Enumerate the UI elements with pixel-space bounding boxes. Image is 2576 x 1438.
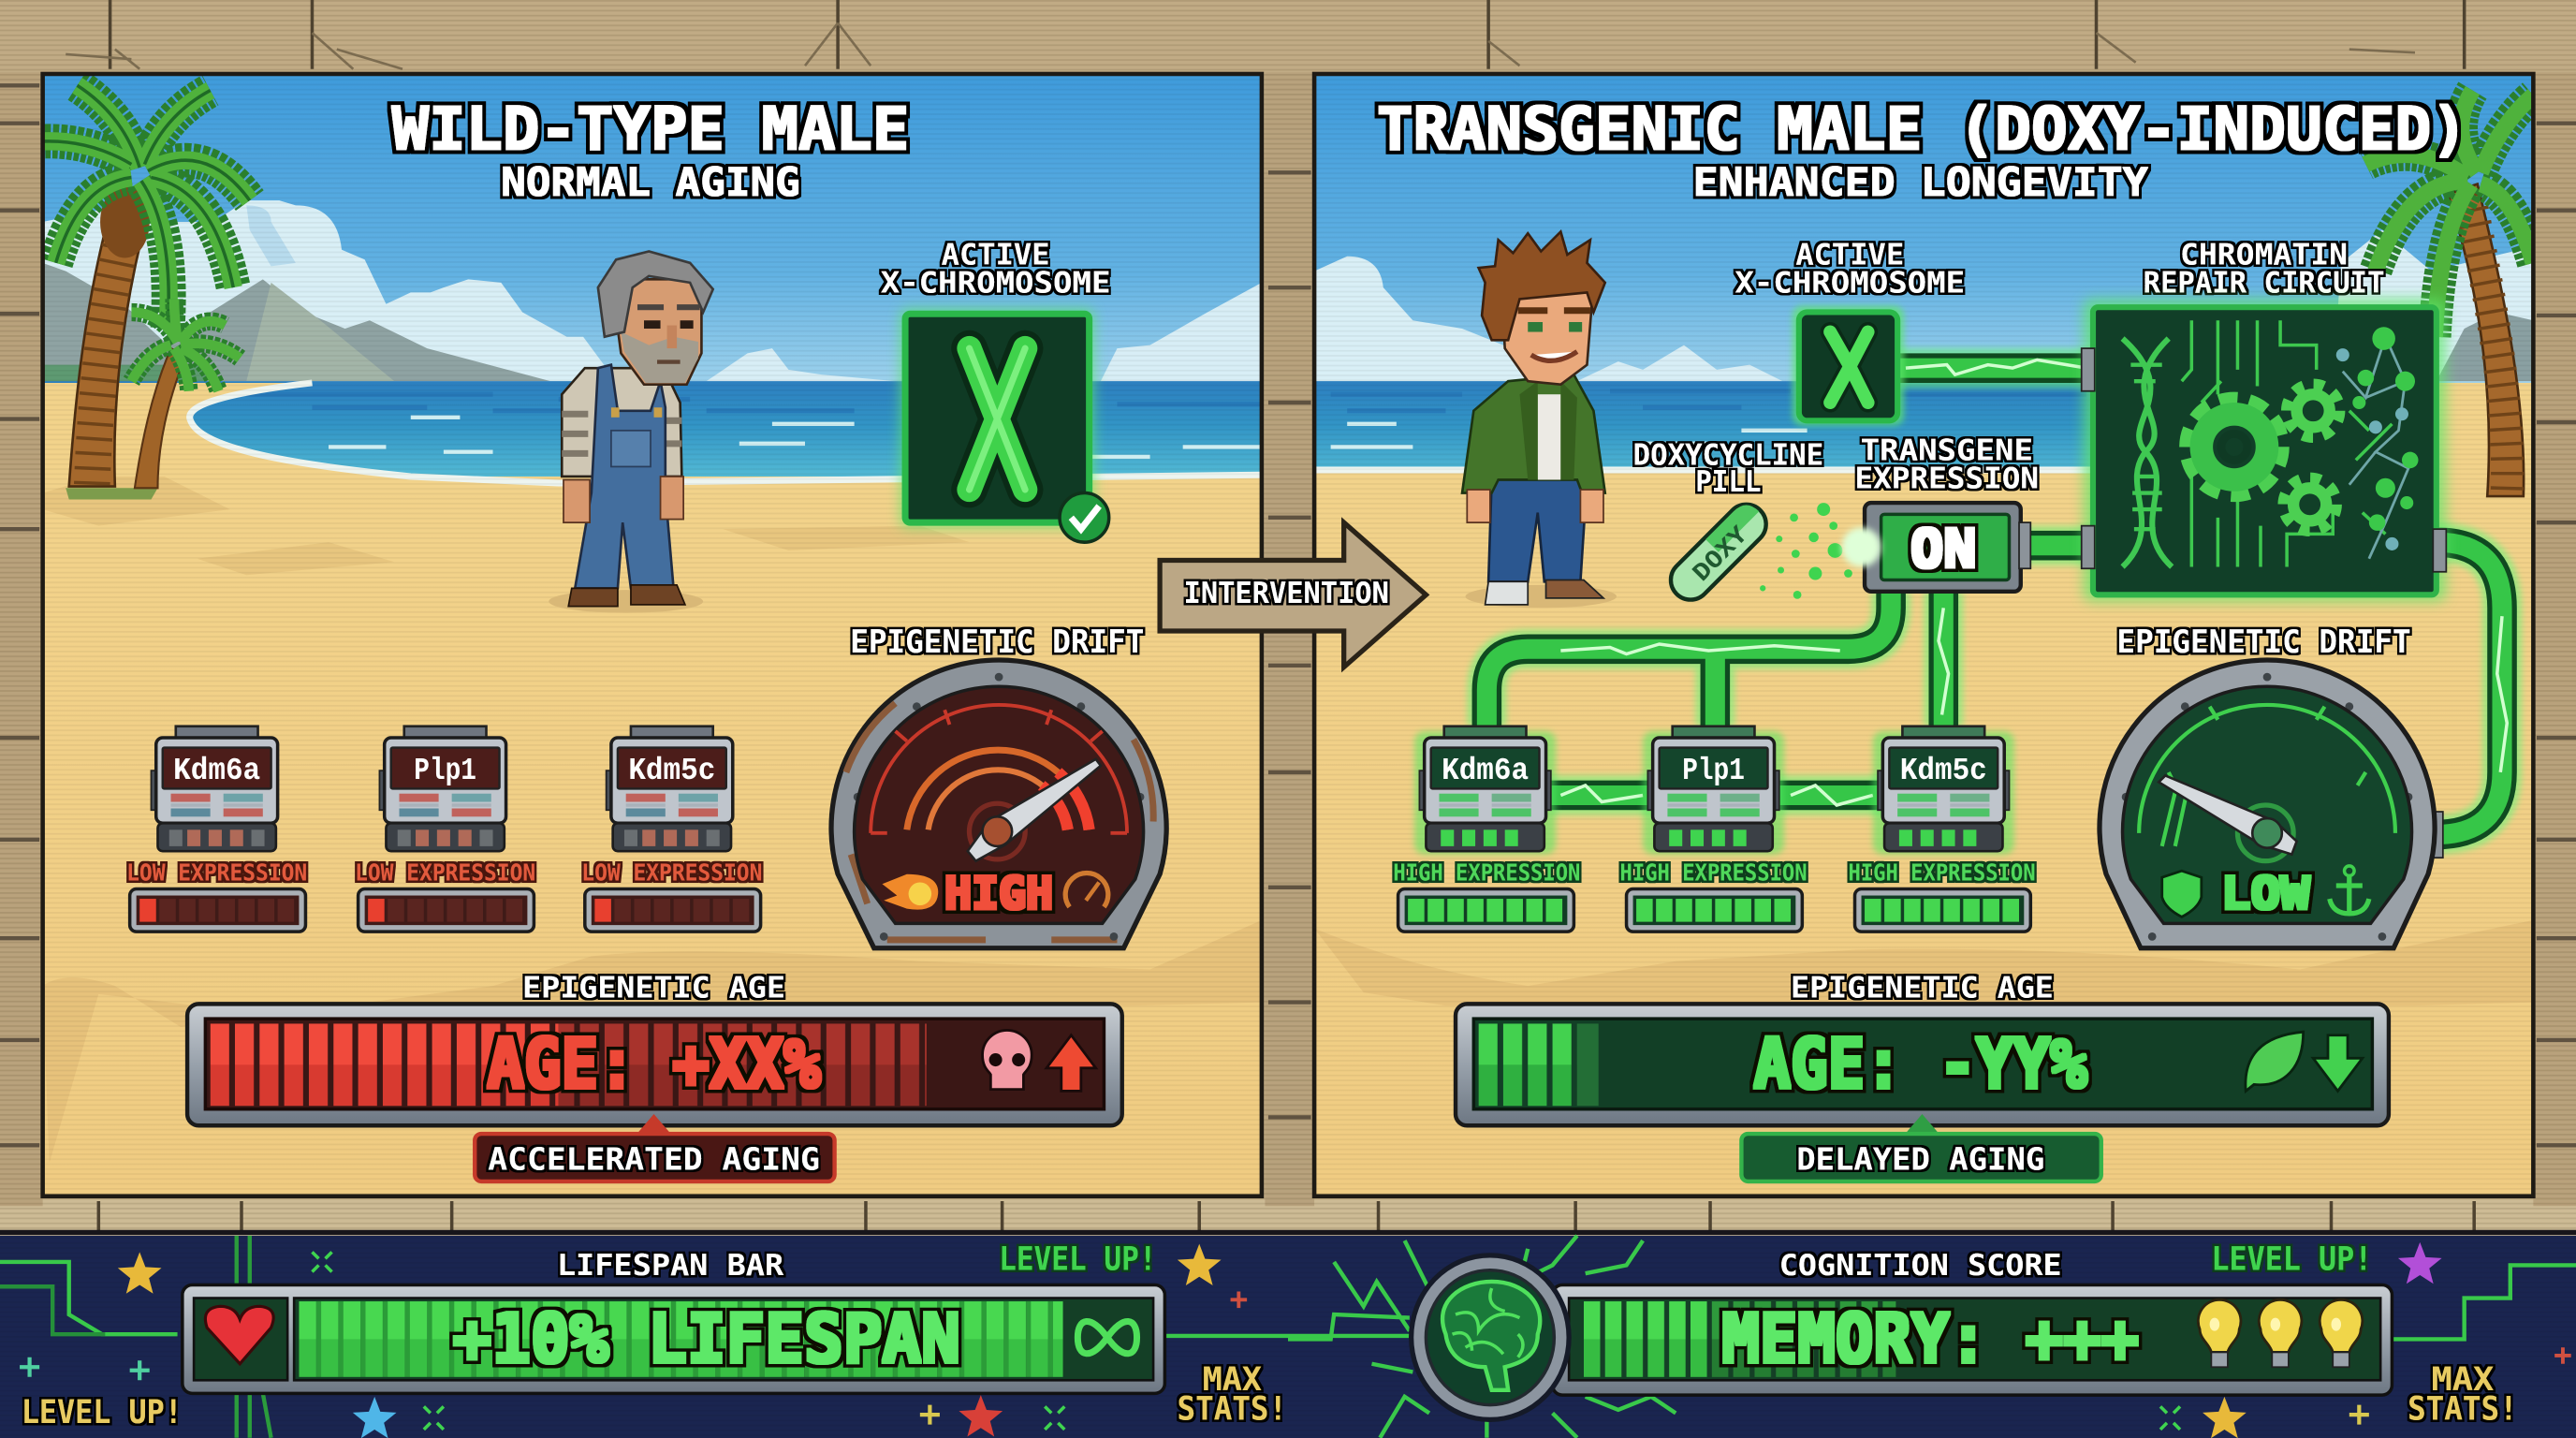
switch: on: [1841, 503, 2030, 592]
panel: transgenic scene background: [1314, 74, 2533, 1196]
label: max stats left: STATS!: [1178, 1389, 1287, 1428]
particles: doxy dissolving: [1760, 503, 1852, 599]
callout: delayed aging: [1741, 1114, 2101, 1181]
callout: accelerated aging: [475, 1114, 835, 1181]
icon: x chromosome small box: [1793, 305, 1904, 426]
expression meter: Kdm6a low: [126, 859, 307, 932]
label: max stats left: [1178, 1360, 1287, 1428]
chip: Kdm6a low: [151, 726, 278, 851]
icon: doxy pill: DOXY: [1687, 521, 1753, 586]
callout: delayed aging: DELAYED AGING: [1796, 1141, 2044, 1178]
arrow: intervention: [1160, 522, 1426, 668]
icon: doxy pill: [1662, 496, 1774, 608]
expression meter: Plp1 high: HIGH EXPRESSION: [1620, 859, 1808, 887]
panel borders: [43, 74, 2533, 1196]
label: active x-chromosome right: ACTIVE: [1795, 239, 1904, 272]
chip: Kdm6a high: [1414, 726, 1556, 855]
chip: Kdm5c low: [607, 726, 733, 851]
label: epigenetic drift left: EPIGENETIC DRIFT: [850, 624, 1144, 661]
gauge: epigenetic drift high: HIGH: [944, 869, 1053, 920]
expression meter: Plp1 high: [1620, 859, 1808, 932]
label: chromatin repair circuit: CHROMATIN: [2180, 239, 2348, 272]
heading: wild-type male: WILD-TYPE MALE: [392, 95, 909, 164]
label: chromatin repair circuit: [2144, 239, 2385, 300]
expression meter: Kdm6a high: [1393, 859, 1580, 932]
callout: accelerated aging: ACCELERATED AGING: [488, 1141, 820, 1178]
expression meter: Kdm6a low: LOW EXPRESSION: [126, 859, 307, 887]
circuit traces and lightning: [0, 1236, 2576, 1438]
label: level up green right: LEVEL UP!: [2211, 1240, 2372, 1279]
switch: on: ON: [1910, 520, 1976, 580]
heading: wild-type male: [392, 95, 909, 205]
expression meter: Plp1 low: [355, 859, 535, 932]
icon: x chromosome box with check: [900, 309, 1109, 542]
chip: Plp1 high: Plp1: [1682, 754, 1745, 789]
expression meter: Kdm5c high: HIGH EXPRESSION: [1848, 859, 2036, 887]
gauge: epigenetic drift low: LOW: [2221, 869, 2310, 920]
chip: Plp1 low: Plp1: [414, 754, 476, 789]
chip: Plp1 low: [379, 726, 506, 851]
expression meter: Kdm6a high: HIGH EXPRESSION: [1393, 859, 1580, 887]
label: max stats right: [2408, 1360, 2518, 1428]
label: transgene expression: EXPRESSION: [1855, 462, 2039, 495]
panel: chromatin repair circuit board: [2082, 299, 2446, 601]
label: active x-chromosome right: [1734, 239, 1965, 300]
arrow: intervention: INTERVENTION: [1184, 577, 1389, 610]
heading: transgenic male: ENHANCED LONGEVITY: [1693, 159, 2148, 205]
expression meter: Kdm5c high: [1848, 859, 2036, 932]
label: transgene expression: TRANSGENE: [1861, 433, 2033, 467]
bar: epigenetic age delayed: AGE: -YY%: [1754, 1025, 2087, 1105]
heading: wild-type male: NORMAL AGING: [501, 159, 800, 205]
label: max stats left: MAX: [1203, 1360, 1262, 1399]
expression meter: Plp1 low: LOW EXPRESSION: [355, 859, 535, 887]
stars and sparkles: [20, 1242, 2571, 1438]
label: epigenetic age right: EPIGENETIC AGE: [1791, 971, 2054, 1005]
bar: lifespan: +10% LIFESPAN: [453, 1299, 960, 1378]
expression meter: Kdm5c low: [581, 859, 762, 932]
label: cognition score: COGNITION SCORE: [1779, 1249, 2062, 1283]
character: young man in green jacket: [1462, 231, 1617, 608]
chip: Kdm5c low: Kdm5c: [628, 754, 715, 789]
label: epigenetic age left: EPIGENETIC AGE: [522, 971, 785, 1005]
label: level up green left: LEVEL UP!: [999, 1240, 1157, 1279]
icon: small palm tree: [131, 299, 240, 488]
label: active x-chromosome: [881, 239, 1110, 300]
label: epigenetic drift right: EPIGENETIC DRIFT: [2116, 624, 2411, 661]
pipes: green energy network: [1486, 360, 2507, 835]
heading: transgenic male: [1377, 95, 2467, 205]
label: doxycycline pill: DOXYCYCLINE: [1633, 439, 1823, 473]
expression meter: Kdm5c low: LOW EXPRESSION: [581, 859, 762, 887]
icon: right palm tree: [2365, 91, 2533, 496]
label: active x-chromosome right: X-CHROMOSOME: [1734, 266, 1965, 300]
icon: large palm tree: [43, 85, 250, 500]
label: transgene expression: [1855, 433, 2039, 495]
bar: lifespan: [183, 1284, 1164, 1393]
label: active x-chromosome: X-CHROMOSOME: [881, 266, 1110, 300]
gauge: epigenetic drift high: [831, 660, 1166, 948]
chip: Kdm6a low: Kdm6a: [173, 754, 260, 789]
icon: brain medallion: [1412, 1255, 1569, 1419]
label: lifespan bar: LIFESPAN BAR: [557, 1249, 784, 1283]
chip: Kdm5c high: Kdm5c: [1900, 754, 1987, 789]
panel: wild-type scene background: [43, 74, 1262, 1196]
label: active x-chromosome: ACTIVE: [942, 239, 1050, 272]
bar: epigenetic age accelerated: [187, 1004, 1122, 1125]
label: max stats right: STATS!: [2408, 1389, 2518, 1428]
character: old man in overalls: [549, 252, 713, 613]
label: doxycycline pill: PILL: [1695, 465, 1761, 499]
label: doxycycline pill: [1633, 439, 1823, 499]
gauge: epigenetic drift low: [2100, 660, 2443, 948]
bar: epigenetic age accelerated: AGE: +XX%: [487, 1025, 821, 1105]
label: chromatin repair circuit: REPAIR CIRCUIT: [2144, 266, 2385, 300]
chip: Plp1 high: [1643, 726, 1784, 855]
bar: epigenetic age delayed: [1456, 1004, 2389, 1125]
chip: Kdm5c high: [1873, 726, 2014, 855]
heading: transgenic male: TRANSGENIC MALE (DOXY-INDUCED): [1377, 95, 2467, 164]
label: max stats right: MAX: [2432, 1360, 2494, 1399]
label: level up gold: LEVEL UP!: [22, 1393, 183, 1431]
bar: cognition: [1553, 1284, 2392, 1395]
chip: Kdm6a high: Kdm6a: [1442, 754, 1529, 789]
bar: cognition: MEMORY: +++: [1721, 1299, 2139, 1378]
panel: bottom status strip: [0, 1236, 2576, 1438]
